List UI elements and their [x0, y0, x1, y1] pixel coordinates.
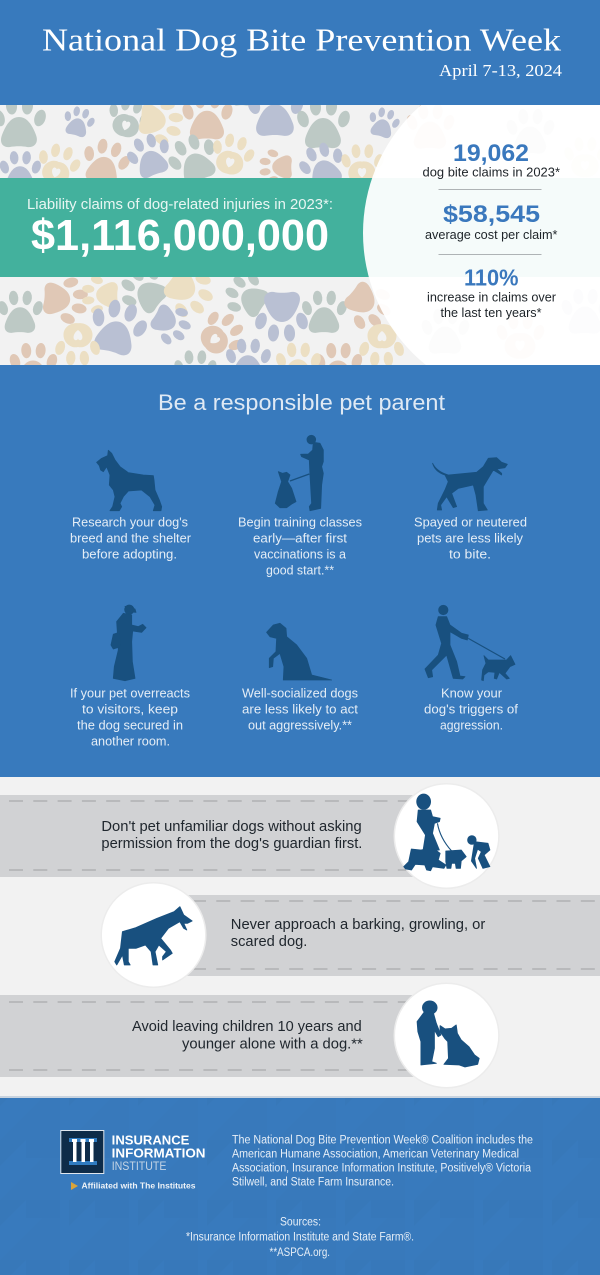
- text: training: [238, 514, 362, 578]
- white circle: [363, 63, 600, 403]
- icon: person walking dog: [425, 605, 515, 681]
- text: visitors: the dog secured in: [77, 718, 183, 732]
- text: spayed: [414, 514, 527, 562]
- heading: Be a responsible pet parent: [158, 390, 445, 415]
- icon: standing dog: [433, 458, 507, 511]
- stat: increase in claims: [427, 264, 557, 320]
- logo: Insurance Information Institute: INSTITUTE: [112, 1159, 166, 1173]
- panel: footer: [0, 1096, 600, 1275]
- text: coalition: Association, Insurance Information Institute, Positively® Victoria: [232, 1163, 532, 1175]
- text: visitors: If your pet overreacts: [70, 686, 190, 700]
- icon: sitting dog: [267, 623, 332, 680]
- panel: paw print banner: [0, 63, 600, 403]
- green band: [0, 178, 600, 277]
- icon: trainer with dog: [275, 435, 323, 511]
- logo: Insurance Information Institute: Affiliated with The Institutes: [82, 1181, 196, 1191]
- text: socialized: are less likely to act: [242, 702, 358, 716]
- stat: average cost: [425, 201, 558, 242]
- icon: person with bag: [111, 605, 146, 681]
- text: visitors: another room.: [91, 734, 170, 748]
- icon circle: doberman: [101, 883, 206, 987]
- stat: average cost: $58,545: [443, 201, 540, 228]
- stat: dog bite claims: [422, 140, 560, 180]
- tip strip: unfamiliar dogs: permission from the dog's guardian first.: [101, 836, 362, 852]
- stat: dog bite claims: 19,062: [453, 140, 529, 167]
- tip strip: barking dog: Never approach a barking, growling, or: [231, 917, 485, 933]
- headline: liability claims: Liability claims of dog-related injuries in 2023*:: [27, 197, 333, 213]
- logo: Insurance Information Institute: [61, 1130, 205, 1191]
- text: coalition: American Humane Association, American Veterinary Medical: [232, 1149, 519, 1161]
- stat: increase in claims: the last ten years*: [440, 305, 542, 320]
- text: training: Begin training classes: [238, 514, 362, 530]
- text: sources: Sources:: [280, 1217, 321, 1229]
- text: sources: **ASPCA.org.: [270, 1247, 330, 1259]
- panel: header: [0, 0, 600, 105]
- stat: increase in claims: increase in claims over: [427, 290, 557, 304]
- text: research: breed and the shelter: [70, 530, 192, 546]
- text: research: before adopting.: [82, 546, 177, 562]
- tip strip: children: [0, 995, 430, 1077]
- text: training: early—after first: [253, 530, 347, 546]
- text: training: good start.**: [266, 562, 334, 578]
- stat: dog bite claims: dog bite claims in 2023*: [422, 164, 560, 180]
- tip strip: children: younger alone with a dog.**: [182, 1036, 363, 1052]
- icon: schnauzer: [97, 450, 162, 511]
- text: visitors: [70, 686, 190, 748]
- date: April 7-13, 2024: [439, 61, 562, 80]
- tip strip: children: Avoid leaving children 10 years and: [132, 1019, 362, 1035]
- text: triggers: dog's triggers of: [424, 702, 518, 716]
- text: training: vaccinations is a: [254, 546, 347, 562]
- tip strip: barking dog: scared dog.: [231, 934, 307, 950]
- text: triggers: [424, 686, 518, 732]
- icon circle: child and dog: [394, 983, 499, 1088]
- text: sources: *Insurance Information Institute and State Farm®.: [186, 1232, 414, 1244]
- text: spayed: pets are less likely: [417, 530, 523, 546]
- text: coalition: The National Dog Bite Prevention Week® Coalition includes the: [232, 1134, 533, 1146]
- headline: liability claims: $1,116,000,000: [31, 211, 329, 260]
- stat: average cost: average cost per claim*: [425, 227, 558, 242]
- title: National Dog Bite Prevention Week: [42, 22, 561, 58]
- text: socialized: [242, 686, 358, 732]
- panel: safety tips: [0, 777, 600, 1097]
- text: coalition: Stilwell, and State Farm Insurance.: [232, 1177, 394, 1189]
- text: sources: [186, 1217, 414, 1259]
- tip strip: unfamiliar dogs: Don't pet unfamiliar dogs without asking: [101, 819, 362, 835]
- icon circle: woman, dogs and child: [394, 784, 499, 888]
- text: research: Research your dog's: [72, 514, 188, 530]
- logo: Insurance Information Institute: INFORMATION: [112, 1146, 206, 1161]
- tip strip: unfamiliar dogs: [0, 795, 430, 877]
- tip strip: barking dog: [170, 895, 600, 976]
- text: spayed: Spayed or neutered: [414, 514, 527, 530]
- text: triggers: Know your: [441, 686, 503, 700]
- panel: be a responsible pet parent: [0, 365, 600, 777]
- stat: increase in claims: 110%: [464, 264, 518, 290]
- logo: Insurance Information Institute: INSURANCE: [112, 1132, 190, 1147]
- text: socialized: Well-socialized dogs: [242, 686, 358, 700]
- text: coalition: [232, 1134, 533, 1189]
- text: socialized: out aggressively.**: [248, 718, 352, 732]
- paw print pattern: [0, 81, 600, 390]
- text: triggers: aggression.: [440, 718, 503, 732]
- text: spayed: to bite.: [449, 546, 491, 562]
- text: research: [70, 514, 192, 562]
- text: visitors: to visitors, keep: [82, 702, 178, 716]
